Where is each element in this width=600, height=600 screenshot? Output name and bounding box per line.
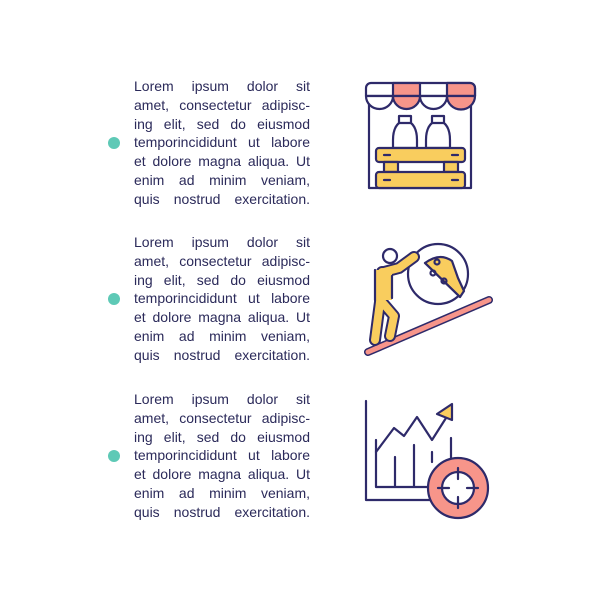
- text block 3: [134, 391, 310, 520]
- text block 2: temporincididunt ut labore: [134, 290, 310, 306]
- text block 2: quis nostrud exercitation.: [134, 347, 310, 363]
- icon: pushing cheese uphill: [368, 244, 489, 352]
- text block 1: amet, consectetur adipisc-: [134, 97, 310, 113]
- bullet 1: [108, 137, 120, 149]
- text block 3: et dolore magna aliqua. Ut: [134, 466, 310, 482]
- text block 3: Lorem ipsum dolor sit: [134, 391, 310, 407]
- text block 2: ing elit, sed do eiusmod: [134, 272, 310, 288]
- text block 2: et dolore magna aliqua. Ut: [134, 309, 310, 325]
- text block 3: enim ad minim veniam,: [134, 485, 310, 501]
- text block 3: amet, consectetur adipisc-: [134, 410, 310, 426]
- text block 2: enim ad minim veniam,: [134, 328, 310, 344]
- bullet 2: [108, 293, 120, 305]
- text block 1: temporincididunt ut labore: [134, 134, 310, 150]
- icon: growth chart with target: [366, 401, 488, 518]
- text block 3: temporincididunt ut labore: [134, 447, 310, 463]
- text block 1: enim ad minim veniam,: [134, 172, 310, 188]
- text block 1: ing elit, sed do eiusmod: [134, 116, 310, 132]
- text block 3: quis nostrud exercitation.: [134, 504, 310, 520]
- text block 2: [134, 234, 310, 363]
- text block 1: et dolore magna aliqua. Ut: [134, 153, 310, 169]
- text block 1: quis nostrud exercitation.: [134, 191, 310, 207]
- text block 3: ing elit, sed do eiusmod: [134, 429, 310, 445]
- bullet 3: [108, 450, 120, 462]
- icon: milk stall: [366, 83, 475, 188]
- text block 2: Lorem ipsum dolor sit: [134, 234, 310, 250]
- text block 1: [134, 78, 310, 207]
- text block 2: amet, consectetur adipisc-: [134, 253, 310, 269]
- text block 1: Lorem ipsum dolor sit: [134, 78, 310, 94]
